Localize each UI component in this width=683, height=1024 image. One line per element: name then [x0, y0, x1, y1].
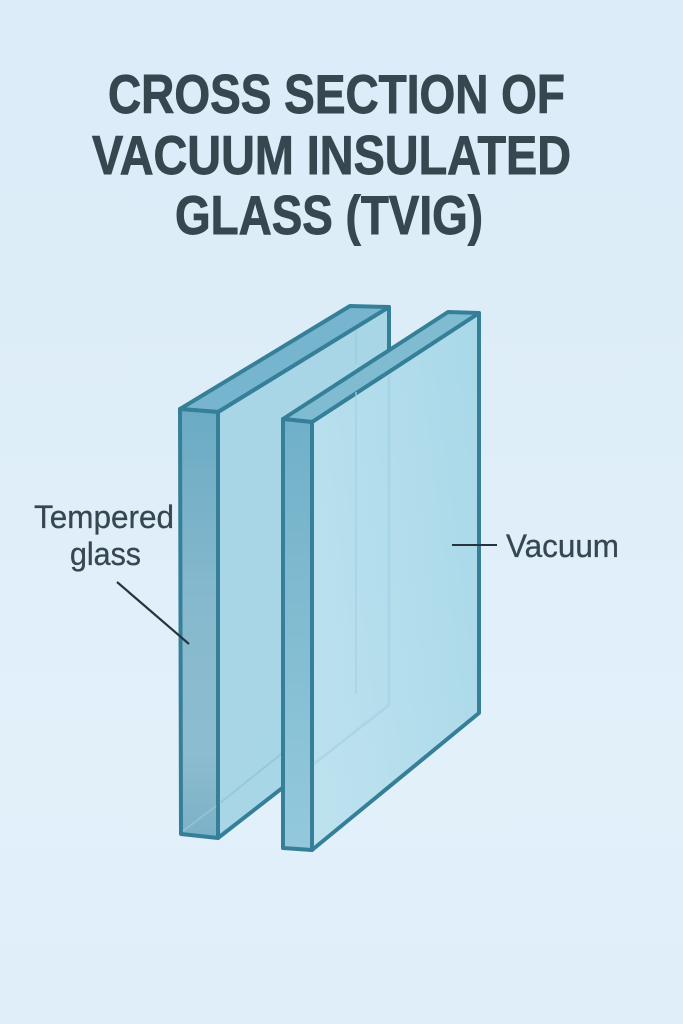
title: VACUUM INSULATED — [92, 124, 571, 186]
front glass pane — [283, 312, 479, 850]
back pane front face — [218, 307, 389, 838]
title: CROSS SECTION OF — [108, 63, 565, 125]
title — [92, 63, 571, 246]
label: tempered glass — [34, 499, 174, 572]
front pane front face — [312, 313, 479, 850]
label: vacuum: Vacuum — [506, 528, 619, 564]
label: tempered glass: Tempered — [34, 499, 174, 535]
ghost edge on back pane top — [355, 330, 357, 364]
leader line: vacuum — [452, 544, 497, 546]
front pane side face — [283, 419, 312, 850]
back pane side face — [180, 409, 218, 838]
leader line: tempered glass — [117, 582, 189, 644]
title: GLASS (TVIG) — [175, 184, 483, 246]
back pane inner reflection — [183, 694, 356, 831]
back pane top face — [180, 306, 389, 412]
ghost edges of back pane seen through the glass — [314, 378, 389, 764]
back glass pane — [180, 306, 389, 838]
label: tempered glass: glass — [70, 536, 141, 572]
front pane top face — [283, 312, 479, 422]
